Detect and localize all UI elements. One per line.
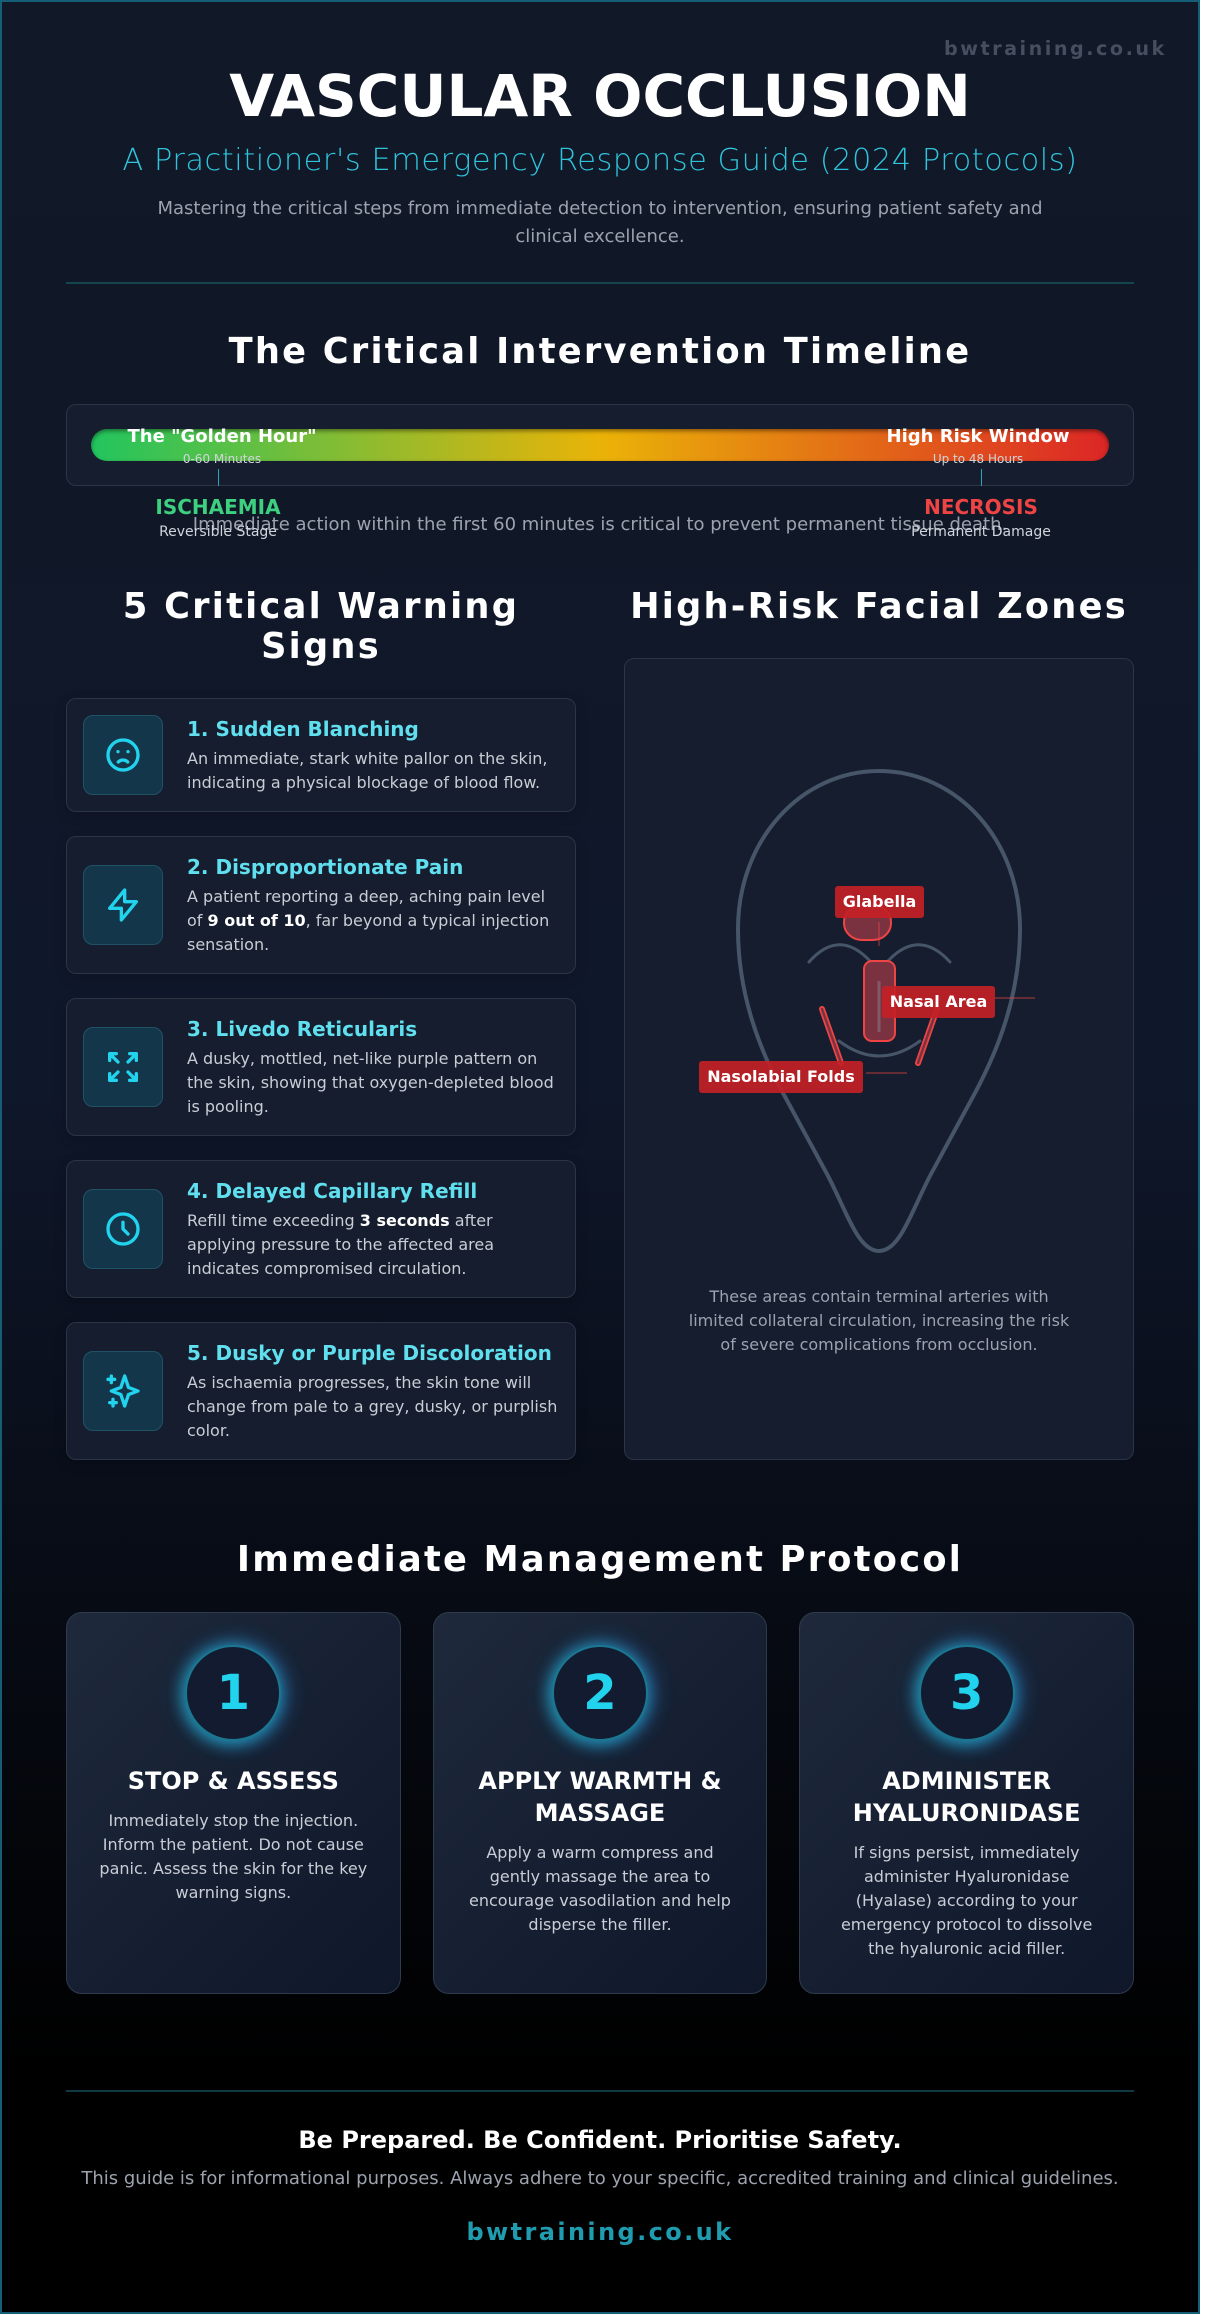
icon: lightning: [83, 865, 163, 945]
number 3: 3: [950, 1665, 983, 1721]
step text: (Hyalase) according to your: [856, 1891, 1078, 1910]
card text: indicates compromised circulation.: [187, 1259, 467, 1278]
intro paragraph: clinical excellence.: [515, 226, 685, 247]
stage: ischaemia: ISCHAEMIA: [155, 495, 281, 519]
step heading: HYALURONIDASE: [853, 1799, 1081, 1827]
number 2: [552, 1645, 648, 1741]
zones note: limited collateral circulation, increasing the risk: [689, 1310, 1069, 1330]
label: nasal area: Nasal Area: [890, 992, 987, 1011]
label: up to 48 hours: Up to 48 Hours: [933, 452, 1023, 466]
face outline: [738, 771, 1020, 1251]
card title: 1. Sudden Blanching: [187, 717, 419, 741]
step card 1: [66, 1612, 401, 1994]
card text: [187, 887, 549, 954]
step text: Immediately stop the injection.: [108, 1811, 358, 1830]
intro paragraph: Mastering the critical steps from immediate detection to intervention, ensuring patient safety and: [157, 198, 1043, 218]
step text: Apply a warm compress and: [486, 1843, 714, 1862]
zones note: These areas contain terminal arteries with: [709, 1286, 1049, 1306]
zone: nasolabial folds: [822, 1009, 937, 1063]
step heading: STOP & ASSESS: [128, 1767, 339, 1795]
step text: the hyaluronic acid filler.: [868, 1939, 1065, 1958]
card text: An immediate, stark white pallor on the skin,: [187, 749, 547, 768]
eyebrows and mouth: [809, 945, 950, 1056]
number 3: [919, 1645, 1015, 1741]
heading: warning signs: 5 Critical Warning: [123, 586, 519, 627]
tick: ischaemia: [218, 469, 219, 486]
step card 2: [433, 1612, 767, 1994]
heading: facial zones: High-Risk Facial Zones: [630, 586, 1128, 627]
tick: necrosis: [981, 469, 982, 486]
card: sudden blanching: [66, 698, 576, 812]
number 1: 1: [217, 1665, 250, 1721]
footer slogan: Be Prepared. Be Confident. Prioritise Safety.: [298, 2126, 902, 2154]
card text: A dusky, mottled, net-like purple pattern on: [187, 1049, 537, 1068]
footer website: bwtraining.co.uk: [466, 2218, 734, 2246]
zone: glabella: [844, 905, 891, 940]
gradient bar: [91, 429, 1109, 461]
label: 0-60 minutes: 0-60 Minutes: [183, 452, 261, 466]
card title: 2. Disproportionate Pain: [187, 855, 463, 879]
heading: timeline: The Critical Intervention Timeline: [229, 331, 971, 372]
heading: warning signs: [123, 586, 519, 667]
card: dusky discoloration: [66, 1322, 576, 1460]
step text: panic. Assess the skin for the key: [99, 1859, 367, 1878]
card title: 5. Dusky or Purple Discoloration: [187, 1341, 552, 1365]
step text: [841, 1843, 1092, 1958]
icon: sparkles: [83, 1351, 163, 1431]
step heading: [478, 1767, 722, 1827]
watermark: bwtraining.co.uk: [944, 37, 1167, 60]
heading: protocol: Immediate Management Protocol: [237, 1539, 963, 1580]
card text: indicating a physical blockage of blood flow.: [187, 773, 540, 792]
card text: is pooling.: [187, 1097, 269, 1116]
face diagram: [736, 769, 1035, 1253]
number 2: 2: [583, 1665, 617, 1721]
step heading: APPLY WARMTH &: [478, 1767, 722, 1795]
stage: necrosis: NECROSIS: [924, 495, 1038, 519]
subtitle: A Practitioner's Emergency Response Guide (2024 Protocols): [122, 142, 1078, 178]
step card 3: [799, 1612, 1134, 1994]
stage note: reversible: Reversible Stage: [159, 524, 277, 540]
zones note: of severe complications from occlusion.: [720, 1334, 1038, 1354]
step text: warning signs.: [176, 1883, 291, 1902]
intro paragraph: [157, 198, 1043, 247]
label: glabella: Glabella: [843, 892, 916, 911]
step text: emergency protocol to dissolve: [841, 1915, 1092, 1934]
icon: expand arrows: [83, 1027, 163, 1107]
card title: 3. Livedo Reticularis: [187, 1017, 417, 1041]
step heading: [853, 1767, 1081, 1827]
card: livedo reticularis: [66, 998, 576, 1136]
step text: [99, 1811, 367, 1902]
heading: warning signs: Signs: [261, 626, 381, 667]
footer disclaimer: This guide is for informational purposes. Always adhere to your specific, accredited training and clinical guidelines.: [81, 2168, 1119, 2189]
label: nasolabial folds: Nasolabial Folds: [707, 1067, 855, 1086]
card text: As ischaemia progresses, the skin tone will: [187, 1373, 531, 1392]
step heading: ADMINISTER: [882, 1767, 1051, 1795]
icon: clock: [83, 1189, 163, 1269]
step text: [469, 1843, 731, 1934]
timeline note: Immediate action within the first 60 minutes is critical to prevent permanent tissue death.: [193, 514, 1007, 535]
card title: 4. Delayed Capillary Refill: [187, 1179, 477, 1203]
step text: If signs persist, immediately: [854, 1843, 1080, 1862]
card: delayed capillary refill: [66, 1160, 576, 1298]
number 1: [185, 1645, 281, 1741]
card text: Refill time exceeding 3 seconds after: [187, 1211, 493, 1230]
leader lines: [866, 922, 1035, 1073]
card text: [187, 1049, 554, 1116]
card text: [187, 1373, 557, 1440]
stage note: permanent: Permanent Damage: [911, 524, 1051, 540]
step text: encourage vasodilation and help: [469, 1891, 731, 1910]
card text: the skin, showing that oxygen-depleted blood: [187, 1073, 554, 1092]
step text: Inform the patient. Do not cause: [103, 1835, 364, 1854]
label: nasolabial folds: [699, 1061, 863, 1093]
card text: A patient reporting a deep, aching pain level: [187, 887, 545, 906]
panel: timeline bar: [66, 404, 1134, 486]
label: high risk window: High Risk Window: [887, 426, 1069, 447]
label: golden hour: The "Golden Hour": [128, 426, 316, 447]
card text: change from pale to a grey, dusky, or purplish: [187, 1397, 557, 1416]
card text: color.: [187, 1421, 230, 1440]
step heading: MASSAGE: [535, 1799, 665, 1827]
card text: of 9 out of 10, far beyond a typical injection: [187, 911, 549, 930]
title: VASCULAR OCCLUSION: [229, 62, 971, 130]
label: glabella: [835, 886, 924, 918]
zone: nasal area: [864, 961, 895, 1041]
step text: administer Hyaluronidase: [864, 1867, 1069, 1886]
panel: facial zones: [624, 658, 1134, 1460]
step text: gently massage the area to: [490, 1867, 710, 1886]
icon: frown face: [83, 715, 163, 795]
card text: [187, 1211, 494, 1278]
card text: [187, 749, 547, 792]
label: nasal area: [882, 986, 995, 1018]
step text: disperse the filler.: [528, 1915, 672, 1934]
card text: applying pressure to the affected area: [187, 1235, 494, 1254]
card text: sensation.: [187, 935, 269, 954]
zones note: [689, 1286, 1070, 1354]
card: disproportionate pain: [66, 836, 576, 974]
